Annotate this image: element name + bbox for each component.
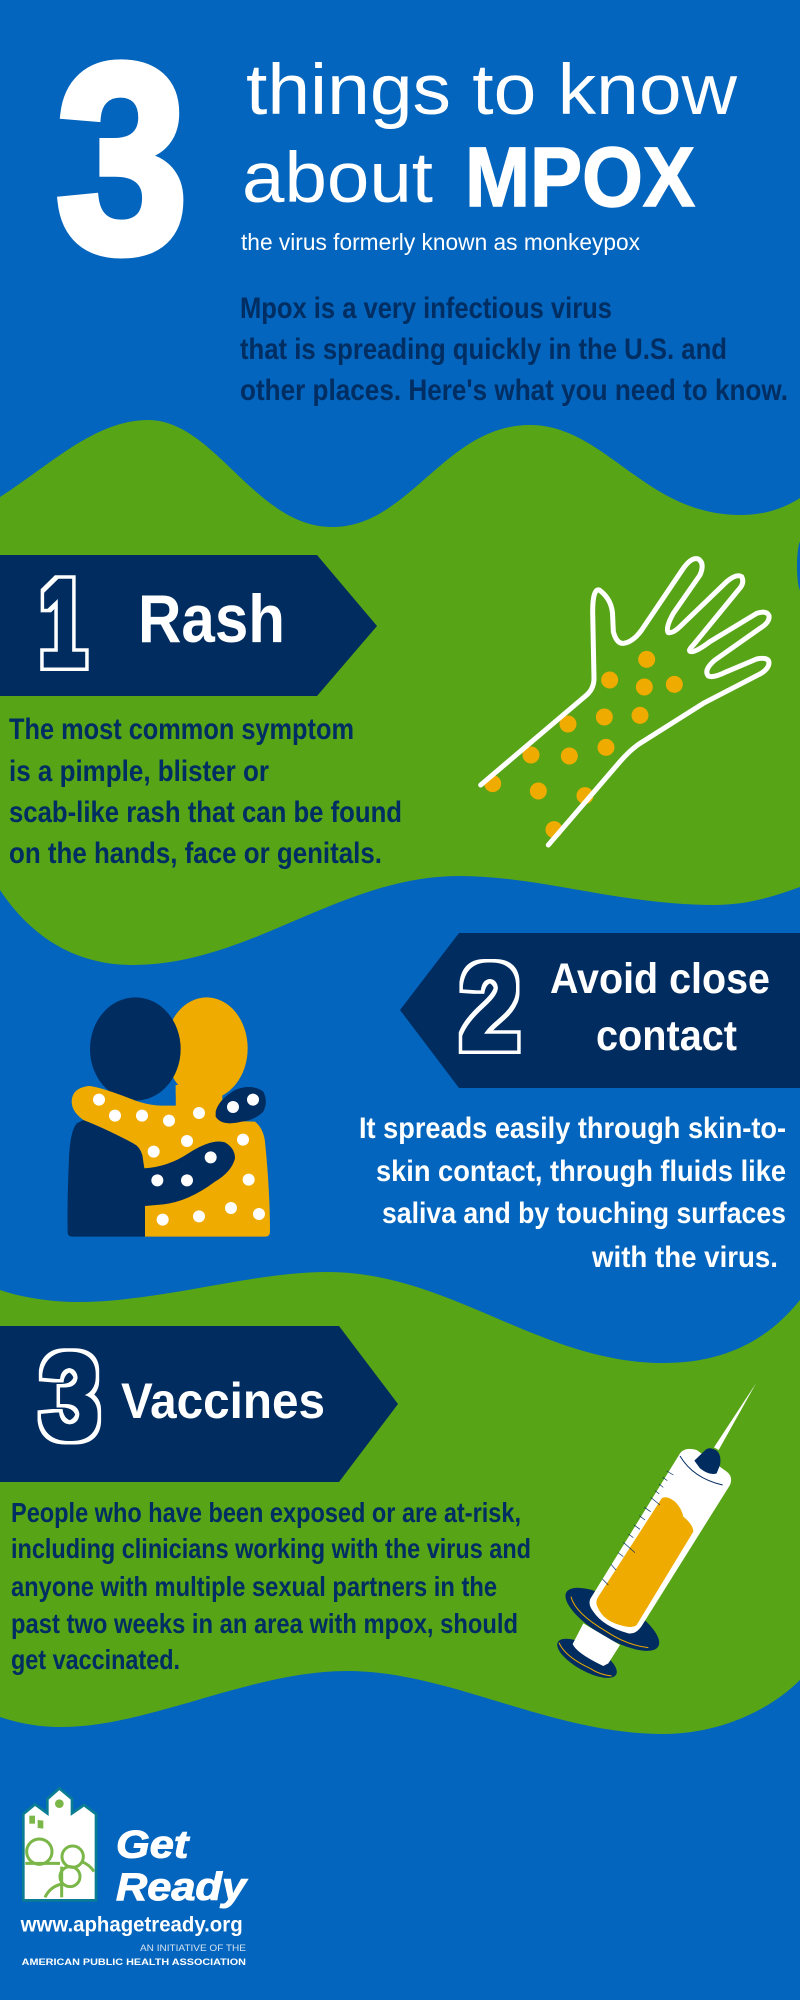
title: about [242, 139, 433, 218]
initiative line: AN INITIATIVE OF THE [140, 1943, 246, 1953]
logo wordmark: Ready [116, 1865, 248, 1909]
banner 3: vaccines [0, 1326, 398, 1482]
numeral 2: 2 [460, 939, 520, 1075]
vaccines body text: anyone with multiple sexual partners in the [11, 1571, 497, 1602]
numeral 1: 1 [40, 555, 86, 693]
vaccines body text [11, 1497, 531, 1675]
heading: Avoid close contact: contact [596, 1012, 737, 1060]
title: MPOX [465, 130, 695, 224]
logo wordmark [116, 1822, 248, 1909]
banner 1: rash [0, 555, 377, 696]
icon: two people hugging [67, 997, 270, 1237]
contact body text: with the virus. [591, 1241, 778, 1274]
rash body text [9, 713, 402, 870]
vaccines body text: past two weeks in an area with mpox, should [11, 1608, 518, 1639]
numeral 3: 3 [40, 1328, 100, 1464]
intro text: that is spreading quickly in the U.S. and [240, 333, 727, 366]
banner 2: avoid close contact [400, 933, 800, 1088]
heading: Avoid close contact: Avoid close [550, 955, 770, 1003]
rash body text: is a pimple, blister or [9, 755, 269, 788]
title [242, 51, 738, 224]
rash body text: The most common symptom [9, 713, 354, 746]
logo: Get Ready [20, 1788, 248, 1967]
website: www.aphagetready.org [20, 1913, 243, 1937]
title: things to know [246, 51, 738, 130]
heading: Avoid close contact [550, 955, 770, 1060]
vaccines body text: get vaccinated. [11, 1644, 180, 1675]
icon: house and family [23, 1788, 96, 1900]
association line: AMERICAN PUBLIC HEALTH ASSOCIATION [22, 1957, 246, 1967]
vaccines body text: including clinicians working with the virus and [11, 1533, 531, 1564]
subtitle: the virus formerly known as monkeypox [241, 229, 640, 255]
heading: Vaccines: Vaccines [121, 1373, 325, 1429]
intro text [240, 292, 788, 407]
big numeral 3: 3 [56, 8, 188, 308]
icon: syringe [552, 1383, 756, 1686]
contact body text [359, 1112, 786, 1274]
green wave panel: rash [0, 420, 800, 965]
logo wordmark: Get [116, 1822, 190, 1866]
rash body text: on the hands, face or genitals. [9, 837, 382, 870]
green wave panel: vaccines [0, 1272, 800, 1734]
heading: Rash: Rash [138, 581, 285, 657]
icon: hand with rash [481, 559, 769, 845]
intro text: Mpox is a very infectious virus [240, 292, 612, 325]
vaccines body text: People who have been exposed or are at-risk, [11, 1497, 521, 1528]
rash body text: scab-like rash that can be found [9, 796, 402, 829]
